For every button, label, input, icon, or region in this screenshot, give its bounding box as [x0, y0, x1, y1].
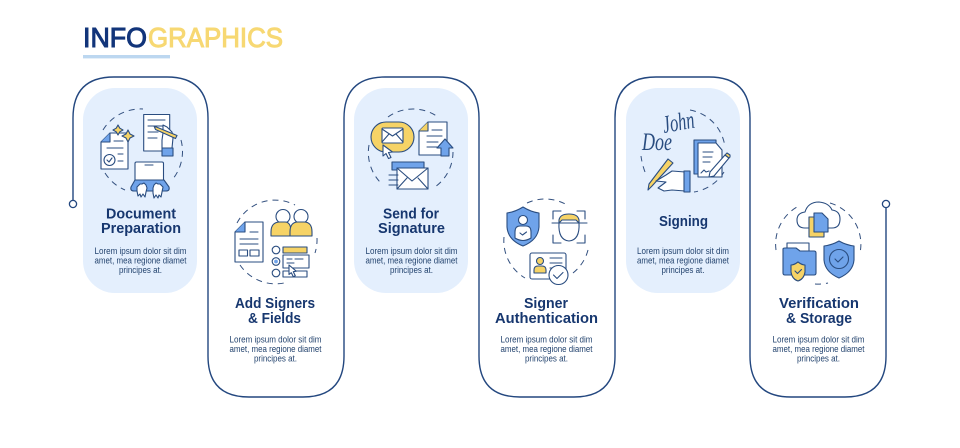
body text: step 2: Lorem ipsum dolor sit dim [230, 334, 322, 344]
heading: add signers and fields: & Fields [248, 311, 301, 327]
body text: step 4: principes at. [525, 354, 568, 364]
icon: signing [641, 107, 730, 192]
end node [882, 200, 890, 208]
body text: step 6: principes at. [797, 354, 840, 364]
heading: send for signature: Send for [383, 206, 439, 222]
panel: step 1 background [83, 88, 197, 293]
heading: send for signature [378, 206, 445, 237]
body text: step 4: amet, mea regione diamet [500, 344, 593, 354]
body text: step 3: principes at. [390, 265, 433, 275]
heading: verification and storage: & Storage [786, 311, 852, 327]
body text: step 1: Lorem ipsum dolor sit dim [94, 246, 186, 256]
body text: step 4: Lorem ipsum dolor sit dim [500, 334, 592, 344]
body text: step 4 [500, 334, 593, 364]
body text: step 3: amet, mea regione diamet [366, 256, 458, 266]
heading: add signers and fields [235, 296, 315, 327]
body text: step 3: Lorem ipsum dolor sit dim [366, 246, 458, 256]
title: INFO [83, 22, 147, 53]
heading: signer authentication: Authentication [495, 311, 598, 327]
panel: step 5 background [626, 88, 740, 293]
body text: step 2: amet, mea regione diamet [230, 344, 322, 354]
panel: step 3 background [354, 88, 468, 293]
heading: add signers and fields: Add Signers [235, 296, 315, 312]
body text: step 6: amet, mea regione diamet [772, 344, 865, 354]
heading: verification and storage [779, 296, 859, 327]
body text: step 5: amet, mea regione diamet [637, 256, 729, 266]
heading: document preparation: Preparation [101, 221, 181, 237]
icon: add signers and fields [235, 200, 317, 284]
heading: document preparation: Document [106, 206, 176, 222]
title: GRAPHICS [148, 22, 283, 53]
body text: step 5: Lorem ipsum dolor sit dim [637, 246, 729, 256]
icon: verification and storage [776, 202, 861, 284]
heading: verification and storage: Verification [779, 296, 859, 312]
icon: send for signature [368, 109, 453, 189]
heading: signing: Signing [659, 214, 708, 230]
heading: signer authentication: Signer [524, 296, 568, 312]
body text: step 2 [230, 334, 322, 364]
title [83, 22, 283, 58]
serpentine connector line [73, 77, 886, 397]
body text: step 1: principes at. [119, 265, 162, 275]
body text: step 6 [772, 334, 865, 364]
body text: step 6: Lorem ipsum dolor sit dim [772, 334, 864, 344]
start node [69, 200, 77, 208]
body text: step 2: principes at. [254, 354, 297, 364]
heading: signer authentication [495, 296, 598, 327]
icon: signing: John [660, 107, 697, 139]
heading: send for signature: Signature [378, 221, 445, 237]
icon: signing: Doe [641, 129, 672, 156]
body text: step 1 [94, 246, 187, 275]
body text: step 1: amet, mea regione diamet [94, 256, 187, 266]
icon: document preparation [101, 109, 183, 198]
heading: document preparation [101, 206, 181, 237]
icon: signer authentication [504, 199, 588, 284]
body text: step 5: principes at. [662, 265, 704, 275]
body text: step 3 [366, 246, 458, 275]
body text: step 5 [637, 246, 729, 275]
